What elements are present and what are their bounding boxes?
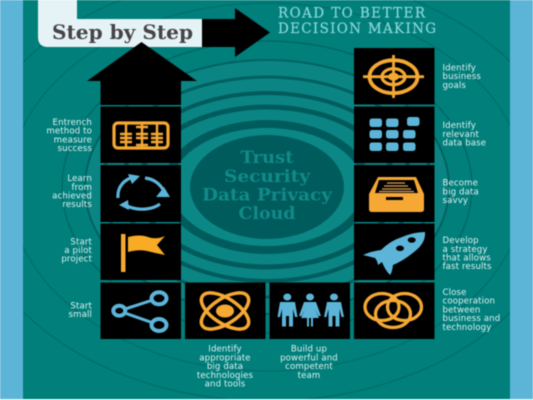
panel: keypad data base <box>354 106 434 163</box>
text: Become big data savvy <box>442 179 479 206</box>
text: Learn from achieved results: from <box>72 183 92 193</box>
text: Develop a strategy that allows fast results: fast results <box>442 262 492 272</box>
panel: file drawer <box>354 165 434 222</box>
text: Learn from achieved results: results <box>62 200 92 210</box>
text: Identify appropriate big data technologies and tools: appropriate <box>199 353 251 363</box>
text: Entrench method to measure success: method to <box>46 127 92 137</box>
text: Learn from achieved results <box>52 174 92 210</box>
panel: abacus <box>100 106 181 163</box>
center text: Trust, Security, Data Privacy, Cloud: Cloud <box>238 204 296 224</box>
text: Become big data savvy: big data <box>442 187 479 197</box>
panel: flag <box>100 224 181 280</box>
heading tab: Step by Step: Step by Step <box>52 20 193 44</box>
heading: Road to better decision making <box>278 6 436 37</box>
text: Build up powerful and competent team: team <box>298 371 320 381</box>
text: Identify relevant data base: Identify <box>442 121 476 131</box>
text: Close cooperation between business and technology: Close <box>442 288 467 298</box>
text: Identify relevant data base: relevant <box>442 130 479 140</box>
text: Start a pilot project <box>61 237 93 265</box>
text: Identify appropriate big data technologies and tools: Identify <box>208 345 242 355</box>
text: Close cooperation between business and technology: between <box>442 306 481 316</box>
text: Start a pilot project: a pilot <box>64 246 93 256</box>
text: Build up powerful and competent team: competent <box>285 362 333 372</box>
text: Start a pilot project: project <box>61 255 93 265</box>
panel: share nodes <box>100 282 181 339</box>
text: Identify appropriate big data technologies and tools: technologies <box>197 371 254 381</box>
panel: recycle arrows <box>100 165 181 222</box>
heading tab: Step by Step <box>38 0 202 47</box>
text: Develop a strategy that allows fast results: that allows <box>442 254 491 264</box>
text: Learn from achieved results: achieved <box>52 192 92 202</box>
panel: target <box>354 48 434 104</box>
text: Build up powerful and competent team: Build up <box>291 345 327 355</box>
text: Entrench method to measure success: Entrench <box>53 118 92 128</box>
text: Close cooperation between business and technology: cooperation <box>442 297 495 307</box>
text: Identify appropriate big data technologies and tools: big data <box>207 362 243 372</box>
text: Close cooperation between business and technology <box>442 288 500 333</box>
center text: Trust, Security, Data Privacy, Cloud: Data Privacy <box>202 186 333 206</box>
text: Entrench method to measure success <box>46 118 92 154</box>
text: Start small: small <box>68 310 92 320</box>
text: Close cooperation between business and technology: technology <box>442 323 491 333</box>
text: Learn from achieved results: Learn <box>67 174 92 184</box>
text: Become big data savvy: savvy <box>442 196 468 206</box>
text: Build up powerful and competent team <box>280 345 338 381</box>
text: Start small: Start <box>70 301 93 311</box>
text: Start small <box>68 301 93 320</box>
text: Identify business goals: business <box>442 72 481 82</box>
panel: team of three people <box>270 282 350 339</box>
center text: Trust, Security, Data Privacy, Cloud <box>202 148 333 224</box>
panel: rocket <box>354 224 434 280</box>
text: Entrench method to measure success: success <box>58 144 92 154</box>
heading: Road to better decision making: ROAD TO BETTER <box>278 6 426 22</box>
text: Identify relevant data base: data base <box>442 138 486 148</box>
text: Identify business goals: Identify <box>442 64 476 74</box>
center text: Trust, Security, Data Privacy, Cloud: Security <box>224 167 311 187</box>
text: Entrench method to measure success: measure <box>54 135 92 145</box>
text: Start a pilot project: Start <box>70 237 93 247</box>
text: Identify relevant data base <box>442 121 486 148</box>
text: Close cooperation between business and technology: business and <box>442 314 500 324</box>
text: Develop a strategy that allows fast results: Develop <box>442 236 479 246</box>
arrow: rightward <box>202 8 270 57</box>
text: Identify appropriate big data technologies and tools: and tools <box>205 380 246 390</box>
text: Build up powerful and competent team: powerful and <box>280 353 338 363</box>
panel: interlocking rings <box>354 282 434 339</box>
text: Identify appropriate big data technologies and tools <box>197 345 254 390</box>
text: Identify business goals <box>442 64 481 91</box>
text: Develop a strategy that allows fast results <box>442 236 492 272</box>
arrow: upward <box>87 42 197 105</box>
center text: Trust, Security, Data Privacy, Cloud: Trust <box>240 148 294 168</box>
text: Become big data savvy: Become <box>442 179 478 189</box>
text: Develop a strategy that allows fast results: a strategy <box>442 245 488 255</box>
text: Identify business goals: goals <box>442 81 466 91</box>
panel: atom <box>185 282 266 339</box>
heading: Road to better decision making: DECISION MAKING <box>278 21 436 37</box>
